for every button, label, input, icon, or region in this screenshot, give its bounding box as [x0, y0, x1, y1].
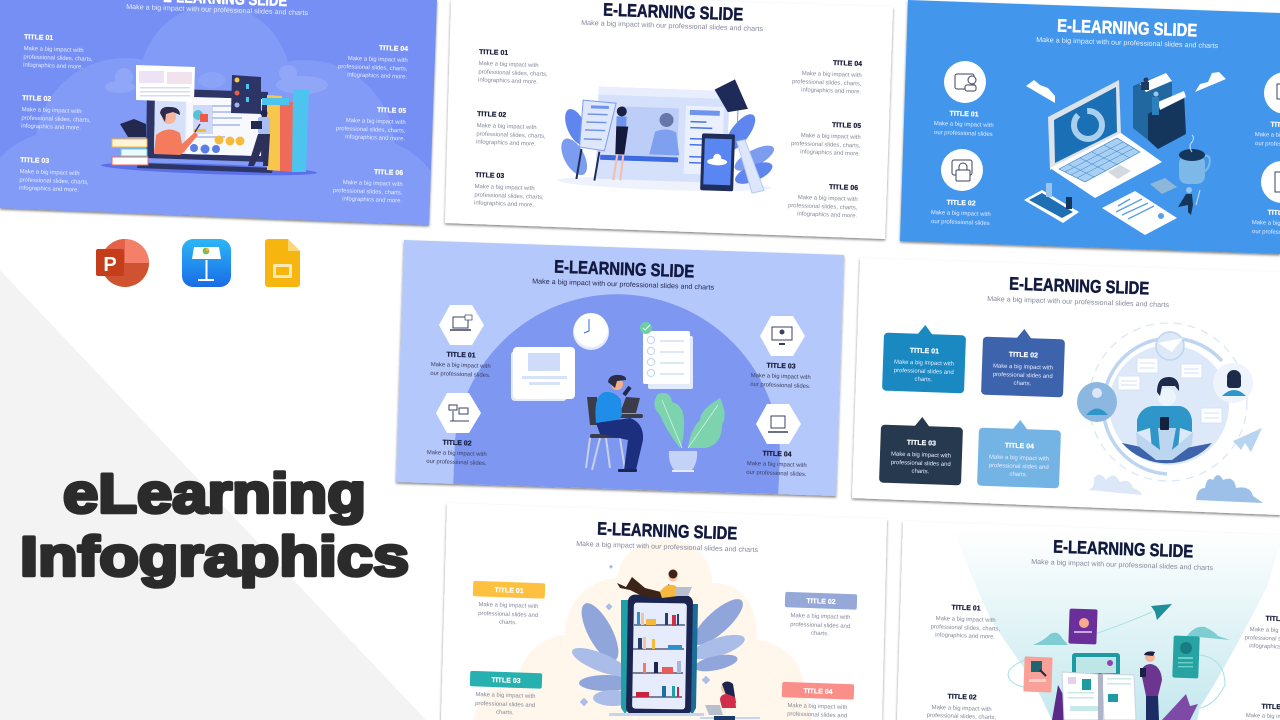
text block: title 03: Make a big impact with [751, 373, 811, 381]
text block: title 01: Make a big impact with [936, 616, 996, 624]
label: title 03 [469, 671, 542, 717]
illustration: isometric laptop, books, cup, tablet, paper [1024, 72, 1226, 235]
label: title 01: charts. [499, 620, 517, 626]
text block: title 06 [333, 168, 404, 204]
label: title 01: professional slides and [478, 611, 538, 619]
label: title 04 [781, 682, 854, 720]
label: title 02: professional slides and [790, 622, 850, 630]
subtitle: Make a big impact with our professional slides and charts [576, 541, 759, 554]
callout: title 02 [981, 328, 1065, 397]
callout: title 04: charts. [1009, 472, 1028, 478]
subtitle: Make a big impact with our professional slides and charts [1036, 37, 1219, 50]
title: eLearning Infographics: eLearning [63, 462, 366, 524]
label: title 03: Make a big impact with [475, 692, 535, 700]
text block: title 01: Make a big impact with [431, 362, 491, 370]
text block: title 01: TITLE 01 [479, 49, 508, 57]
text block: title right upper [1244, 615, 1280, 652]
icon circle: title 04 [1261, 161, 1280, 203]
text block: title 05: infographics and more. [800, 149, 861, 157]
text block: title 04: Make a big impact with [348, 56, 408, 64]
subtitle: Make a big impact with our professional slides and charts [987, 296, 1170, 309]
text block: title 06: TITLE 06 [374, 169, 403, 177]
icon hexagon: title 04 [756, 404, 801, 444]
text block: title 01: TITLE 01 [951, 604, 981, 613]
text block: title 05 [336, 106, 407, 142]
cloud backdrop [473, 540, 812, 720]
callout: title 04 [977, 419, 1061, 488]
icon circle: title 02 [941, 149, 983, 191]
text block: title 02 [21, 95, 92, 132]
text block: title 04 [746, 450, 808, 478]
text block: title 05: TITLE 05 [832, 122, 861, 130]
text block: title 01: professional slides, charts, [23, 54, 93, 63]
callout: title 02: charts. [1013, 381, 1032, 387]
heading: E-LEARNING SLIDE [1053, 537, 1194, 561]
text block: title right lower [1246, 703, 1280, 720]
panel: slide 2 white six titles [445, 0, 893, 239]
text block: title 02 [930, 199, 991, 227]
icon: PowerPoint [96, 239, 149, 287]
panel: slide 4 periwinkle with dome and hexagons [396, 240, 844, 500]
text block: title 04: infographics and more. [347, 72, 408, 80]
text block: title 03: infographics and more. [19, 185, 79, 194]
panel: slide 7 white with pale teal funnel and open book [897, 521, 1280, 720]
label: title 01 [472, 581, 545, 627]
text block: title 01 [933, 110, 994, 138]
title: eLearning Infographics: Infographics [20, 524, 409, 588]
label: title 03: professional slides and [475, 701, 535, 709]
label: title 04: TITLE 04 [803, 688, 833, 696]
text block: title 04: professional slides, charts, [792, 79, 862, 87]
text block: title 04 [792, 59, 863, 95]
text block: title 04: TITLE 04 [833, 60, 862, 68]
text block: title 01: Make a big impact with [24, 46, 84, 54]
text block: title 05: Make a big impact with [801, 133, 861, 141]
callout: title 01: professional slides and [894, 368, 954, 376]
heading: E-LEARNING SLIDE [1009, 274, 1150, 298]
label: title 02: Make a big impact with [790, 613, 850, 621]
text block: title 06: Make a big impact with [343, 180, 403, 188]
text block: title 01: professional slides, charts, [478, 69, 548, 78]
text block: title 03: TITLE 03 [20, 157, 49, 165]
text block: title 05: TITLE 05 [377, 107, 406, 115]
text block: title 03: Make a big impact with [20, 169, 80, 177]
label: title 02: TITLE 02 [806, 598, 836, 606]
text block: title 05: Make a big impact with [346, 118, 406, 126]
heading: E-LEARNING SLIDE [603, 0, 744, 24]
text block: title 01 [930, 604, 1001, 641]
illustration: student on phone inside circle with contacts [1077, 323, 1263, 503]
text block: title 01 [430, 351, 492, 379]
text block: title 06: TITLE 06 [829, 184, 858, 192]
text block: title 04: TITLE 04 [762, 450, 792, 459]
subtitle: Make a big impact with our professional slides and charts [126, 4, 309, 17]
text block: title 01: infographics and more. [23, 62, 83, 71]
panel: slide 3 blue with circles and isometric laptop [900, 0, 1280, 254]
text block: title 03 [1254, 121, 1280, 149]
text block: title 02: TITLE 02 [22, 95, 51, 103]
text block: title 05: infographics and more. [345, 134, 406, 142]
subtitle: Make a big impact with our professional slides and charts [581, 20, 764, 33]
callout: title 03: professional slides and [891, 460, 951, 468]
callout: title 02: Make a big impact with [993, 363, 1053, 372]
text block: title 06: infographics and more. [797, 211, 858, 219]
heading: E-LEARNING SLIDE [1057, 16, 1198, 40]
text block: title 02: infographics and more. [21, 123, 81, 132]
funnel backdrop [953, 530, 1280, 720]
text block: title 03: Make a big impact with [475, 184, 535, 192]
text block: title 02 [426, 439, 488, 467]
panel: slide 5 white with speech boxes [852, 258, 1280, 515]
text block: title 01: our professional slides. [430, 371, 491, 379]
text block: title 01: our professional slides [934, 130, 993, 138]
icon: Keynote [182, 239, 231, 287]
text block: title 03 [750, 362, 812, 390]
text block: title 01: infographics and more. [935, 632, 995, 641]
label: title 04: Make a big impact with [787, 703, 847, 711]
panel: slide 6 white with peach cloud and bookshelf phone [441, 503, 887, 720]
text block: title 06: professional slides, charts, [788, 203, 858, 211]
text block: title 04: TITLE 04 [379, 45, 408, 53]
text block: title 01: infographics and more. [478, 77, 538, 86]
text block: title 02: Make a big impact with [932, 705, 992, 713]
text block: title 03: TITLE 03 [766, 362, 796, 371]
callout: title 03: charts. [911, 469, 930, 475]
background triangle [0, 270, 426, 720]
text block: title 01: Make a big impact with [934, 121, 994, 129]
text block: title 01 [478, 49, 549, 86]
icon circle: title 01 [944, 61, 986, 103]
heading: E-LEARNING SLIDE [597, 519, 738, 543]
text block: title 03 [19, 157, 90, 194]
illustration: online classroom window, tablet, cap [554, 73, 780, 194]
cloud backdrop [0, 5, 431, 225]
callout: title 01: charts. [914, 377, 933, 383]
callout: title 04: TITLE 04 [1005, 442, 1034, 451]
illustration: student at desk, clock, book, checklist, plant [511, 313, 725, 472]
text block: title 03 [474, 172, 545, 209]
text block: title 01: TITLE 01 [949, 110, 979, 119]
text block: title 02 [927, 693, 997, 720]
text block: title 02: TITLE 02 [946, 199, 976, 208]
text block: title 02: TITLE 02 [477, 111, 506, 119]
text block: title 02: our professional slides. [426, 459, 487, 467]
text block: title 02: TITLE 02 [947, 693, 977, 702]
text block: title 05 [791, 121, 862, 157]
text block: title 03: professional slides, charts, [19, 177, 89, 186]
text block: title 02 [476, 111, 547, 148]
callout: title 02: professional slides and [993, 372, 1053, 380]
label: title 02: charts. [811, 631, 829, 637]
text block: title 02: Make a big impact with [931, 210, 991, 218]
icon: PowerPoint: P [103, 254, 117, 276]
heading: E-LEARNING SLIDE [554, 257, 695, 281]
callout: title 04: Make a big impact with [989, 454, 1049, 463]
text block: title 03: our professional slides. [750, 382, 811, 390]
text block: title 04: Make a big impact with [747, 461, 807, 469]
text block: title 01: Make a big impact with [479, 61, 539, 69]
label: title 01: Make a big impact with [478, 602, 538, 610]
callout: title 03: TITLE 03 [907, 439, 936, 448]
icon circle: title 03 [1264, 72, 1280, 114]
label: title 01: TITLE 01 [494, 587, 524, 595]
text block: title 05: professional slides, charts, [336, 126, 406, 134]
text block: title 01 [23, 34, 94, 71]
title: eLearning Infographics [20, 462, 409, 588]
label: title 04: professional slides and [787, 711, 847, 720]
text block: title 02: Make a big impact with [427, 450, 487, 458]
illustration: phone bookshelf with readers and leaves [569, 565, 760, 720]
callout: title 01 [882, 324, 966, 393]
text block: title 02: professional slides, charts, [21, 115, 91, 124]
text block: title 06: professional slides, charts, [333, 188, 403, 196]
text block: title 02: our professional slides [931, 219, 990, 227]
text block: title 03: infographics and more. [474, 200, 534, 209]
subtitle: Make a big impact with our professional slides and charts [1031, 559, 1214, 572]
icon hexagon: title 02 [436, 393, 481, 433]
illustration: teacher at laptop with books [101, 65, 328, 178]
text block: title 02: Make a big impact with [22, 107, 82, 115]
callout: title 03: Make a big impact with [891, 451, 951, 460]
text block: title 02: TITLE 02 [442, 439, 472, 448]
text block: title 06: infographics and more. [342, 196, 403, 204]
dome backdrop [453, 294, 780, 500]
callout: title 03 [879, 416, 963, 485]
label: title 03: TITLE 03 [491, 677, 521, 685]
text block: title 01: professional slides, charts, [931, 624, 1001, 633]
subtitle: Make a big impact with our professional slides and charts [532, 278, 715, 292]
text block: title 04: professional slides, charts, [338, 64, 408, 72]
label: title 02 [784, 592, 857, 638]
text block: title 05: professional slides, charts, [791, 141, 861, 149]
illustration: open book, cards, plane and learner [1008, 604, 1230, 720]
text block: title 04: infographics and more. [801, 87, 862, 95]
panel: slide 1 purple-blue six titles [0, 0, 439, 228]
text block: title 01: TITLE 01 [446, 351, 476, 360]
icon hexagon: title 03 [760, 316, 805, 356]
text block: title 02: Make a big impact with [477, 123, 537, 131]
callout: title 04: professional slides and [989, 463, 1049, 471]
text block: title 06 [788, 183, 859, 219]
text block: title 04 [338, 44, 409, 80]
text block: title 03: TITLE 03 [475, 172, 504, 180]
icon: Google Slides [265, 239, 300, 287]
text block: title 04: Make a big impact with [802, 71, 862, 79]
callout: title 01: Make a big impact with [894, 359, 954, 368]
icon hexagon: title 01 [439, 305, 484, 345]
label: title 03: charts. [496, 710, 514, 716]
text block: title 02: professional slides, charts, [476, 131, 546, 140]
text block: title 04: our professional slides. [746, 470, 807, 478]
text block: title 02: infographics and more. [476, 139, 536, 148]
text block: title 04 [1251, 209, 1280, 237]
text block: title 06: Make a big impact with [798, 195, 858, 203]
text block: title 01: TITLE 01 [24, 34, 53, 42]
callout: title 02: TITLE 02 [1009, 351, 1038, 360]
text block: title 03: professional slides, charts, [474, 192, 544, 201]
callout: title 01: TITLE 01 [910, 347, 939, 356]
